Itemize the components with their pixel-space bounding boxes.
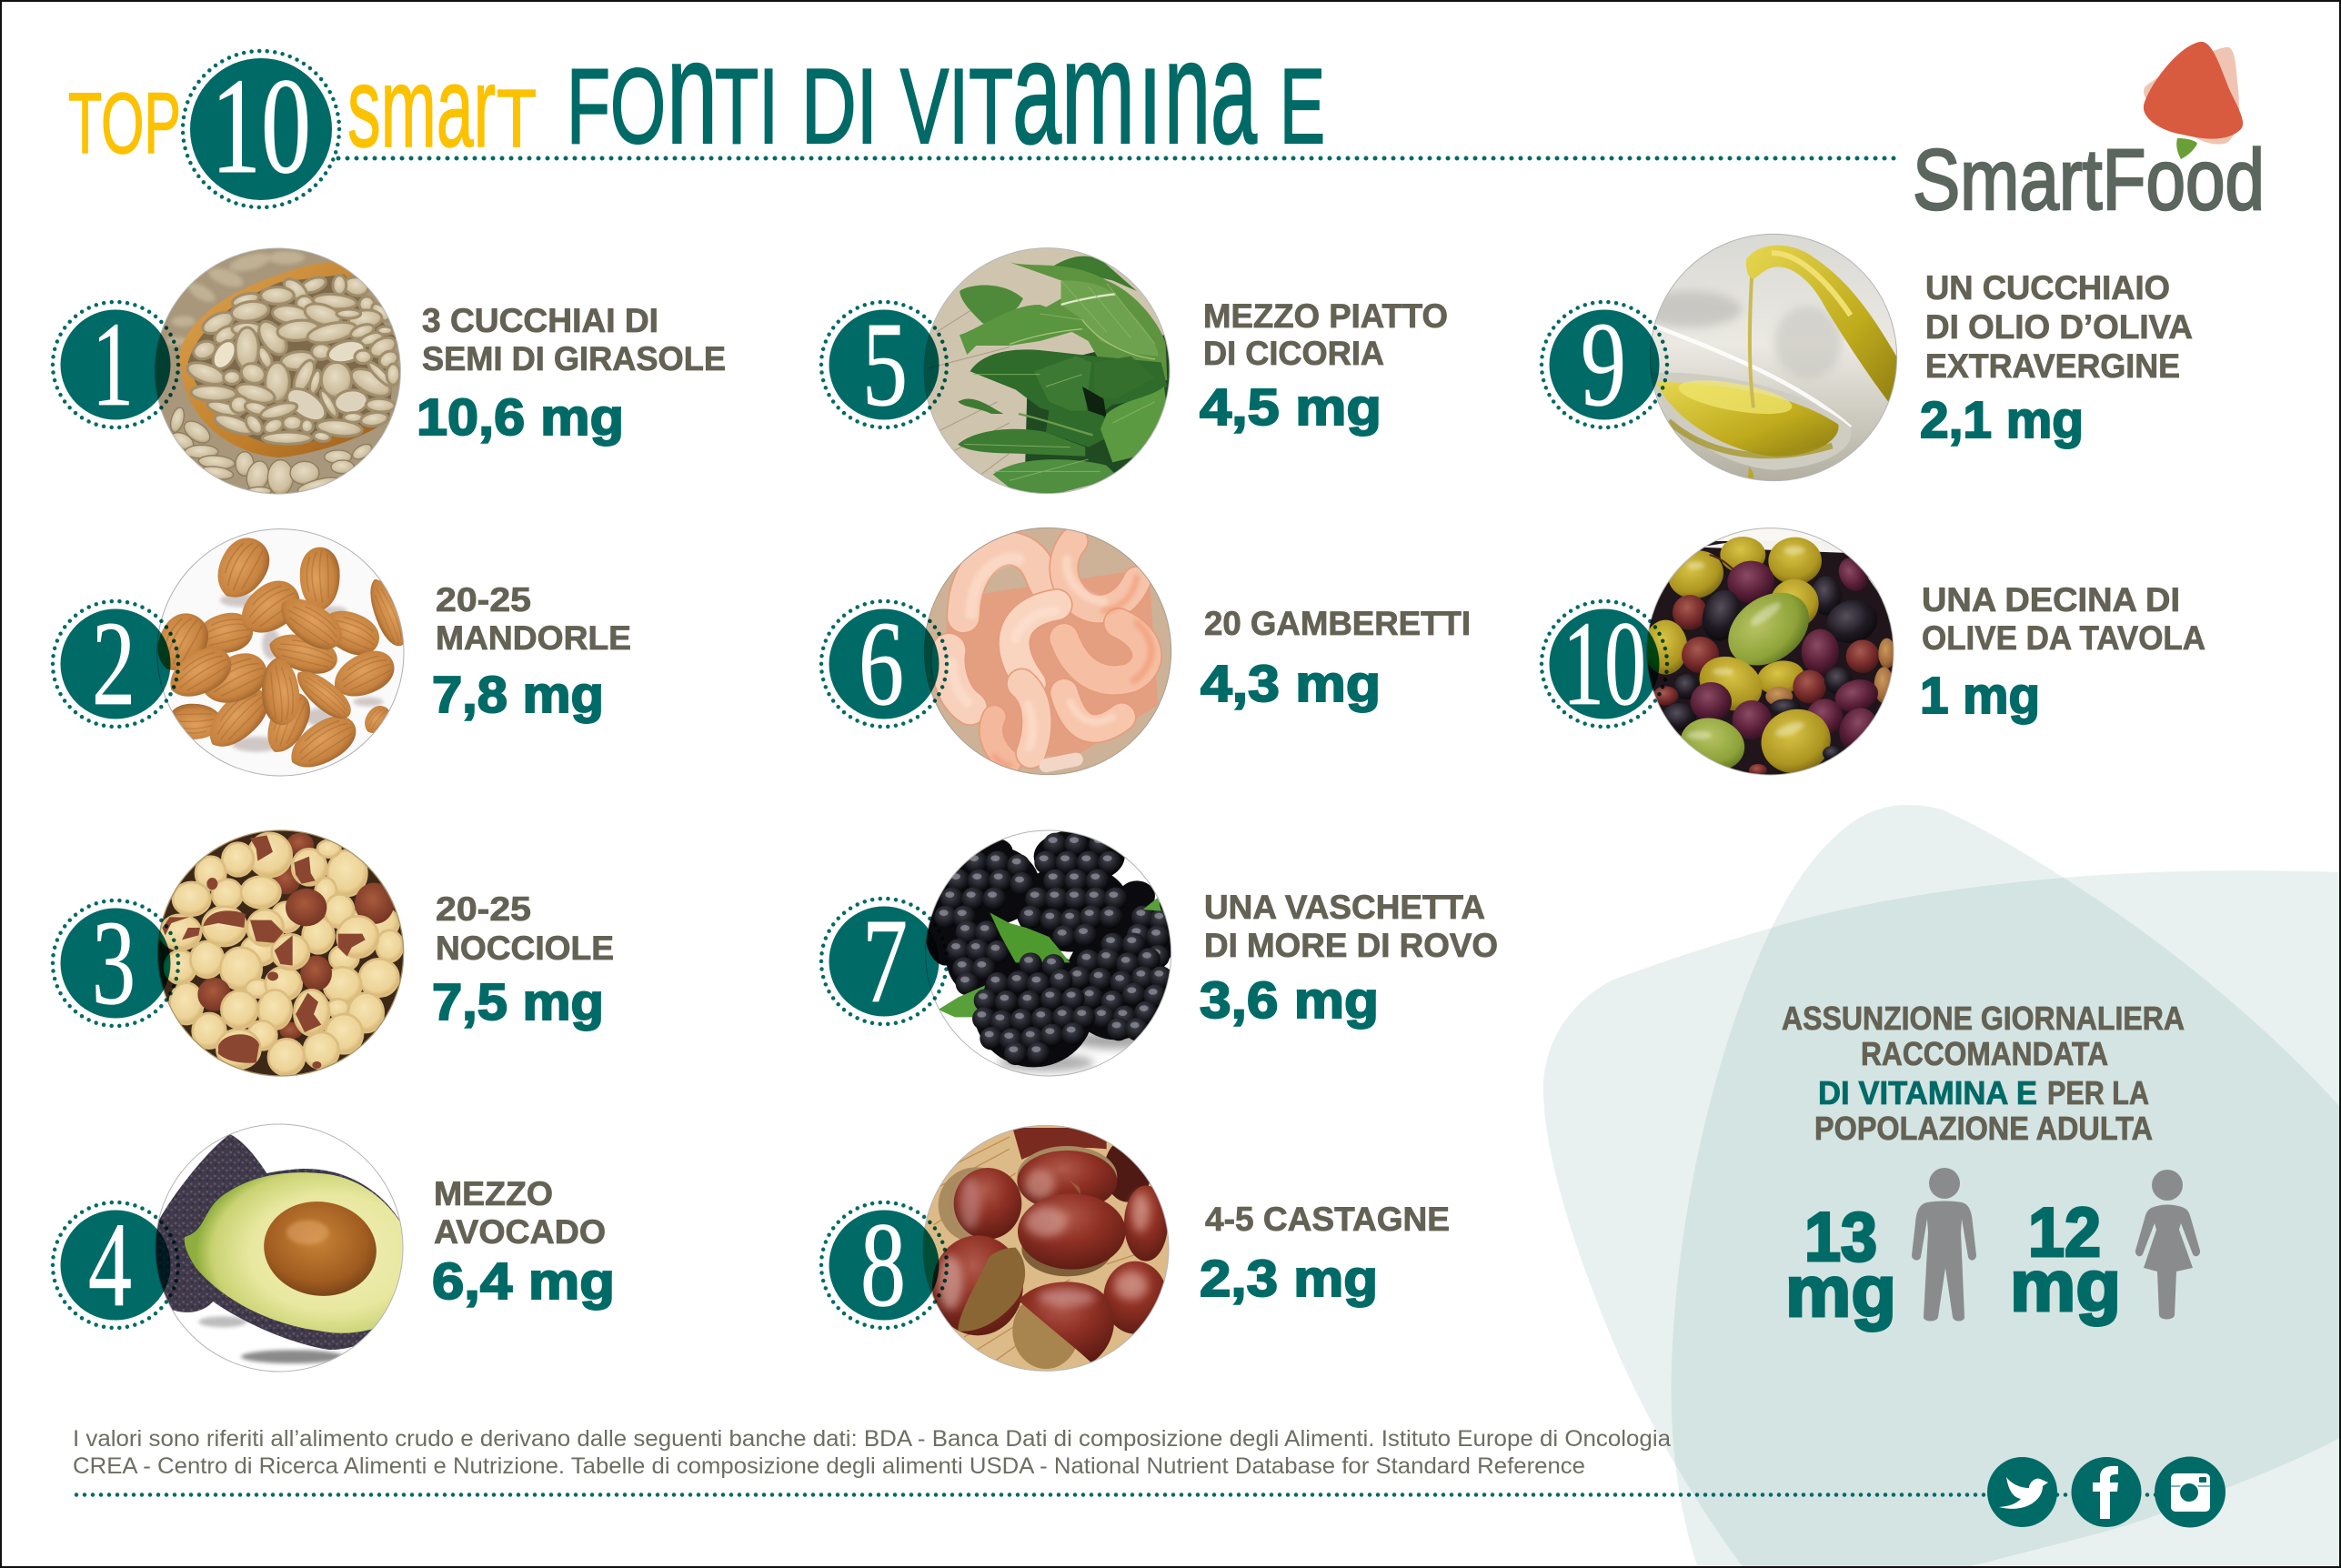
title: smart: T (497, 74, 537, 165)
value: women 12 mg: mg (2010, 1245, 2121, 1326)
icon: man (1912, 1168, 1976, 1321)
item 7: blackberries (821, 823, 1498, 1082)
photo: avocado (150, 1119, 411, 1378)
badge 2: 2 (92, 596, 136, 730)
badge 6 (821, 596, 947, 730)
value 6: 4,3 mg (1201, 655, 1381, 713)
value 2: 7,8 mg (432, 666, 604, 724)
description 7: UNA VASCHETTA (1204, 889, 1485, 926)
badge 2 (53, 596, 178, 730)
item 6: shrimps (821, 523, 1471, 782)
title: Fonti di Vitamina E: VIT (900, 46, 1013, 166)
value: women 12 mg (2010, 1194, 2121, 1326)
panel: recommended daily intake (1782, 1000, 2200, 1332)
item 9: olive oil: DI OLIO D’OLIVA (1925, 308, 2193, 346)
title: Fonti di Vitamina E: DI (801, 46, 878, 166)
value 7: 3,6 mg (1200, 971, 1379, 1030)
item 9: olive oil (1542, 227, 2193, 487)
photo: chicory leaves (919, 241, 1178, 500)
panel heading: DI VITAMINA E (1818, 1074, 2037, 1111)
badge 7: 7 (862, 893, 908, 1028)
badge 9: 9 (1581, 297, 1626, 431)
title: badge 10: 10 (211, 49, 311, 202)
description 8: 4-5 CASTAGNE (1205, 1201, 1450, 1238)
panel heading: ASSUNZIONE GIORNALIERA (1782, 1000, 2185, 1037)
icon: twitter (1987, 1457, 2057, 1527)
description 10: UNA DECINA DI (1922, 581, 2180, 618)
item 1: sunflower seeds: SEMI DI GIRASOLE (422, 340, 726, 377)
item 3: hazelnuts (53, 823, 614, 1082)
panel heading: PER LA (2047, 1074, 2149, 1111)
item 3: hazelnuts: NOCCIOLE (436, 930, 614, 967)
badge 6: 6 (859, 596, 904, 730)
value 1: 10,6 mg (417, 388, 624, 447)
description 3: 20-25 (436, 890, 531, 928)
value: men 13 mg: 13 (1804, 1199, 1877, 1276)
title: Fonti di Vitamina E: n (667, 10, 718, 175)
title: Fonti di Vitamina E: na (1164, 10, 1258, 175)
description 4: MEZZO (434, 1175, 553, 1212)
footnote (73, 1426, 1671, 1479)
badge 1: 1 (92, 297, 134, 431)
description 9: UN CUCCHIAIO (1925, 269, 2170, 307)
photo: almonds (156, 528, 404, 777)
title: smart: smar (347, 45, 496, 171)
footnote: I valori sono riferiti all’alimento crudo e derivano dalle seguenti banche dati: BDA - Banca Dati di composizione degli Alimenti. Istituto Europe di Oncologia (73, 1426, 1671, 1452)
item 10: olives (1542, 523, 2205, 782)
photo: table olives (1643, 523, 1904, 782)
title (68, 10, 1325, 207)
value 5: 4,5 mg (1200, 378, 1381, 437)
item 4: avocado (53, 1119, 615, 1378)
logo: SmartFood (1913, 42, 2265, 228)
title: Fonti di Vitamina E: am (1012, 10, 1135, 175)
value 10: 1 mg (1920, 667, 2040, 725)
badge 3: 3 (92, 895, 136, 1030)
photo: hazelnuts (150, 823, 409, 1082)
badge 5: 5 (862, 297, 908, 431)
icon: instagram (2155, 1457, 2225, 1528)
panel heading (1782, 1000, 2185, 1147)
footnote: CREA - Centro di Ricerca Alimenti e Nutrizione. Tabelle di composizione degli alimenti USDA - National Nutrient Database for Standard Reference (73, 1453, 1585, 1479)
description 5: MEZZO PIATTO (1203, 297, 1448, 335)
value 3: 7,5 mg (432, 973, 604, 1031)
item 4: avocado: AVOCADO (434, 1213, 606, 1251)
photo: olive oil poured on spoon (1650, 233, 1897, 482)
description 2: 20-25 (436, 581, 531, 618)
title: TOP: TOP (68, 75, 181, 172)
badge 8 (821, 1197, 947, 1332)
value: men 13 mg (1785, 1199, 1896, 1332)
badge 8: 8 (860, 1197, 906, 1332)
description 1: 3 CUCCHIAI DI (422, 302, 658, 339)
description 6: 20 GAMBERETTI (1204, 605, 1471, 642)
icon: facebook (2072, 1457, 2141, 1527)
item 10: olives: OLIVE DA TAVOLA (1922, 619, 2205, 657)
photo: shrimps in bowl (919, 523, 1178, 782)
badge 3 (53, 895, 178, 1030)
badge 10: 10 (1562, 596, 1646, 730)
badge 9 (1542, 297, 1667, 431)
badge 1 (53, 297, 178, 431)
item 1: sunflower seeds (53, 241, 726, 500)
photo: chestnuts (919, 1119, 1178, 1378)
item 2: almonds: MANDORLE (436, 619, 631, 657)
value 8: 2,3 mg (1200, 1250, 1378, 1308)
value: men 13 mg: mg (1785, 1251, 1896, 1332)
value 4: 6,4 mg (432, 1252, 615, 1311)
background blobs (1543, 805, 2341, 1568)
item 5: chicory (821, 241, 1448, 500)
value 9: 2,1 mg (1920, 391, 2084, 449)
item 5: chicory: DI CICORIA (1203, 335, 1384, 372)
photo: sunflower seeds in wooden spoon (150, 241, 409, 500)
badge 4: 4 (88, 1197, 132, 1332)
badge 7 (821, 893, 947, 1028)
badge 5 (821, 297, 947, 431)
icon: woman (2135, 1170, 2200, 1319)
item 7: blackberries: DI MORE DI ROVO (1204, 927, 1498, 964)
panel heading: POPOLAZIONE ADULTA (1814, 1110, 2153, 1147)
title: Fonti di Vitamina E: E (1280, 46, 1325, 166)
badge 4 (53, 1197, 178, 1332)
value: women 12 mg: 12 (2028, 1194, 2101, 1271)
logo: SmartFood: SmartFood (1913, 132, 2265, 228)
panel heading: RACCOMANDATA (1861, 1035, 2108, 1072)
title: Fonti di Vitamina E: TI (715, 46, 779, 166)
item 2: almonds (53, 523, 631, 782)
title: Fonti di Vitamina E: I (1139, 46, 1161, 166)
item 9: olive oil: EXTRAVERGINE (1925, 347, 2180, 385)
title: Fonti di Vitamina E: FO (567, 46, 666, 166)
photo: blackberries (919, 823, 1178, 1082)
item 8: chestnuts (821, 1119, 1450, 1378)
